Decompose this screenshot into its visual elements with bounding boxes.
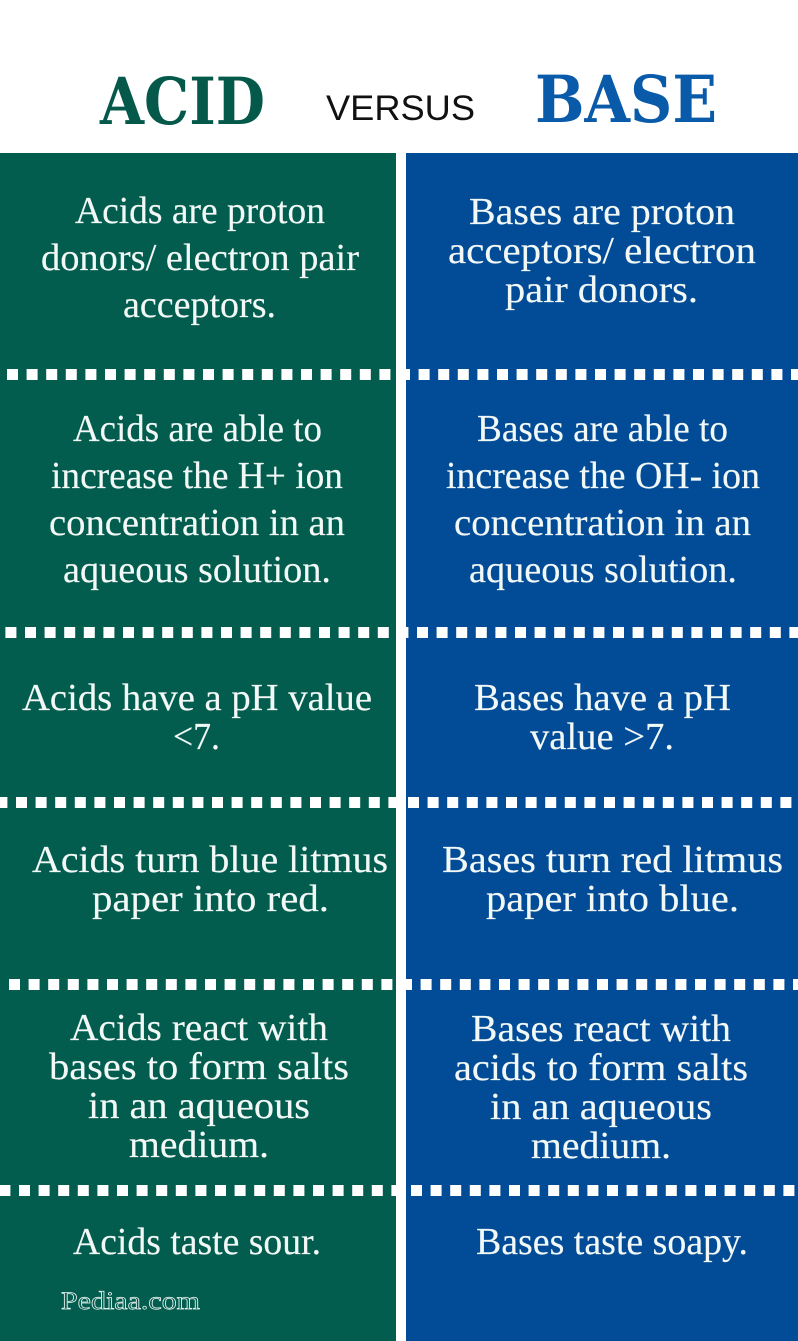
acid row 2: ion concentration <box>49 408 345 591</box>
acid row 6: taste: Acids taste sour. <box>73 1221 321 1263</box>
acid row 4: litmus: Acids turn blue litmus <box>32 839 388 881</box>
acid row 5: reaction: in an aqueous <box>88 1085 310 1127</box>
title: VERSUS: VERSUS <box>326 89 475 128</box>
acid row 5: reaction: Acids react with <box>70 1007 328 1049</box>
watermark: Pediaa.com: Pediaa.com <box>61 1288 201 1315</box>
base row 1: definition <box>448 191 756 311</box>
base row 5: reaction <box>454 1008 748 1167</box>
base row 3: pH value: value >7. <box>530 716 674 758</box>
base row 2: ion concentration: Bases are able to <box>477 408 728 450</box>
base row 1: definition: acceptors/ electron <box>448 230 756 272</box>
acid row 1: definition: Acids are proton <box>75 190 325 232</box>
panel: base column <box>406 153 798 1341</box>
acid row 5: reaction: bases to form salts <box>49 1046 349 1088</box>
base row 3: pH value <box>474 677 731 758</box>
acid row 2: ion concentration: Acids are able to <box>73 408 322 450</box>
acid row 4: litmus: paper into red. <box>92 878 329 920</box>
acid row 3: pH value <box>22 677 372 758</box>
acid row 1: definition: donors/ electron pair <box>41 237 359 279</box>
title: BASE: BASE <box>535 62 717 138</box>
acid row 1: definition: acceptors. <box>123 284 276 326</box>
acid row 2: ion concentration: increase the H+ ion <box>51 455 343 497</box>
acid row 3: pH value: Acids have a pH value <box>22 677 372 719</box>
acid row 2: ion concentration: concentration in an <box>49 502 345 544</box>
title: ACID: ACID <box>99 64 265 140</box>
base row 1: definition: pair donors. <box>505 269 698 311</box>
base row 5: reaction: medium. <box>531 1125 671 1167</box>
base row 2: ion concentration: aqueous solution. <box>469 549 737 591</box>
base row 2: ion concentration: concentration in an <box>454 502 751 544</box>
base row 5: reaction: Bases react with <box>471 1008 731 1050</box>
acid row 3: pH value: <7. <box>173 716 220 758</box>
base row 4: litmus <box>442 839 783 920</box>
acid row 2: ion concentration: aqueous solution. <box>63 549 331 591</box>
base row 2: ion concentration: increase the OH- ion <box>446 455 760 497</box>
base row 5: reaction: in an aqueous <box>490 1086 712 1128</box>
acid row 1: definition <box>41 190 359 326</box>
base row 5: reaction: acids to form salts <box>454 1047 748 1089</box>
acid row 5: reaction: medium. <box>129 1124 269 1166</box>
acid row 4: litmus <box>32 839 388 920</box>
base row 4: litmus: paper into blue. <box>486 878 739 920</box>
base row 3: pH value: Bases have a pH <box>474 677 731 719</box>
acid row 5: reaction <box>49 1007 349 1166</box>
panel: acid column <box>0 153 396 1341</box>
base row 2: ion concentration <box>446 408 760 591</box>
base row 6: taste: Bases taste soapy. <box>476 1221 748 1263</box>
base row 1: definition: Bases are proton <box>469 191 735 233</box>
base row 4: litmus: Bases turn red litmus <box>442 839 783 881</box>
